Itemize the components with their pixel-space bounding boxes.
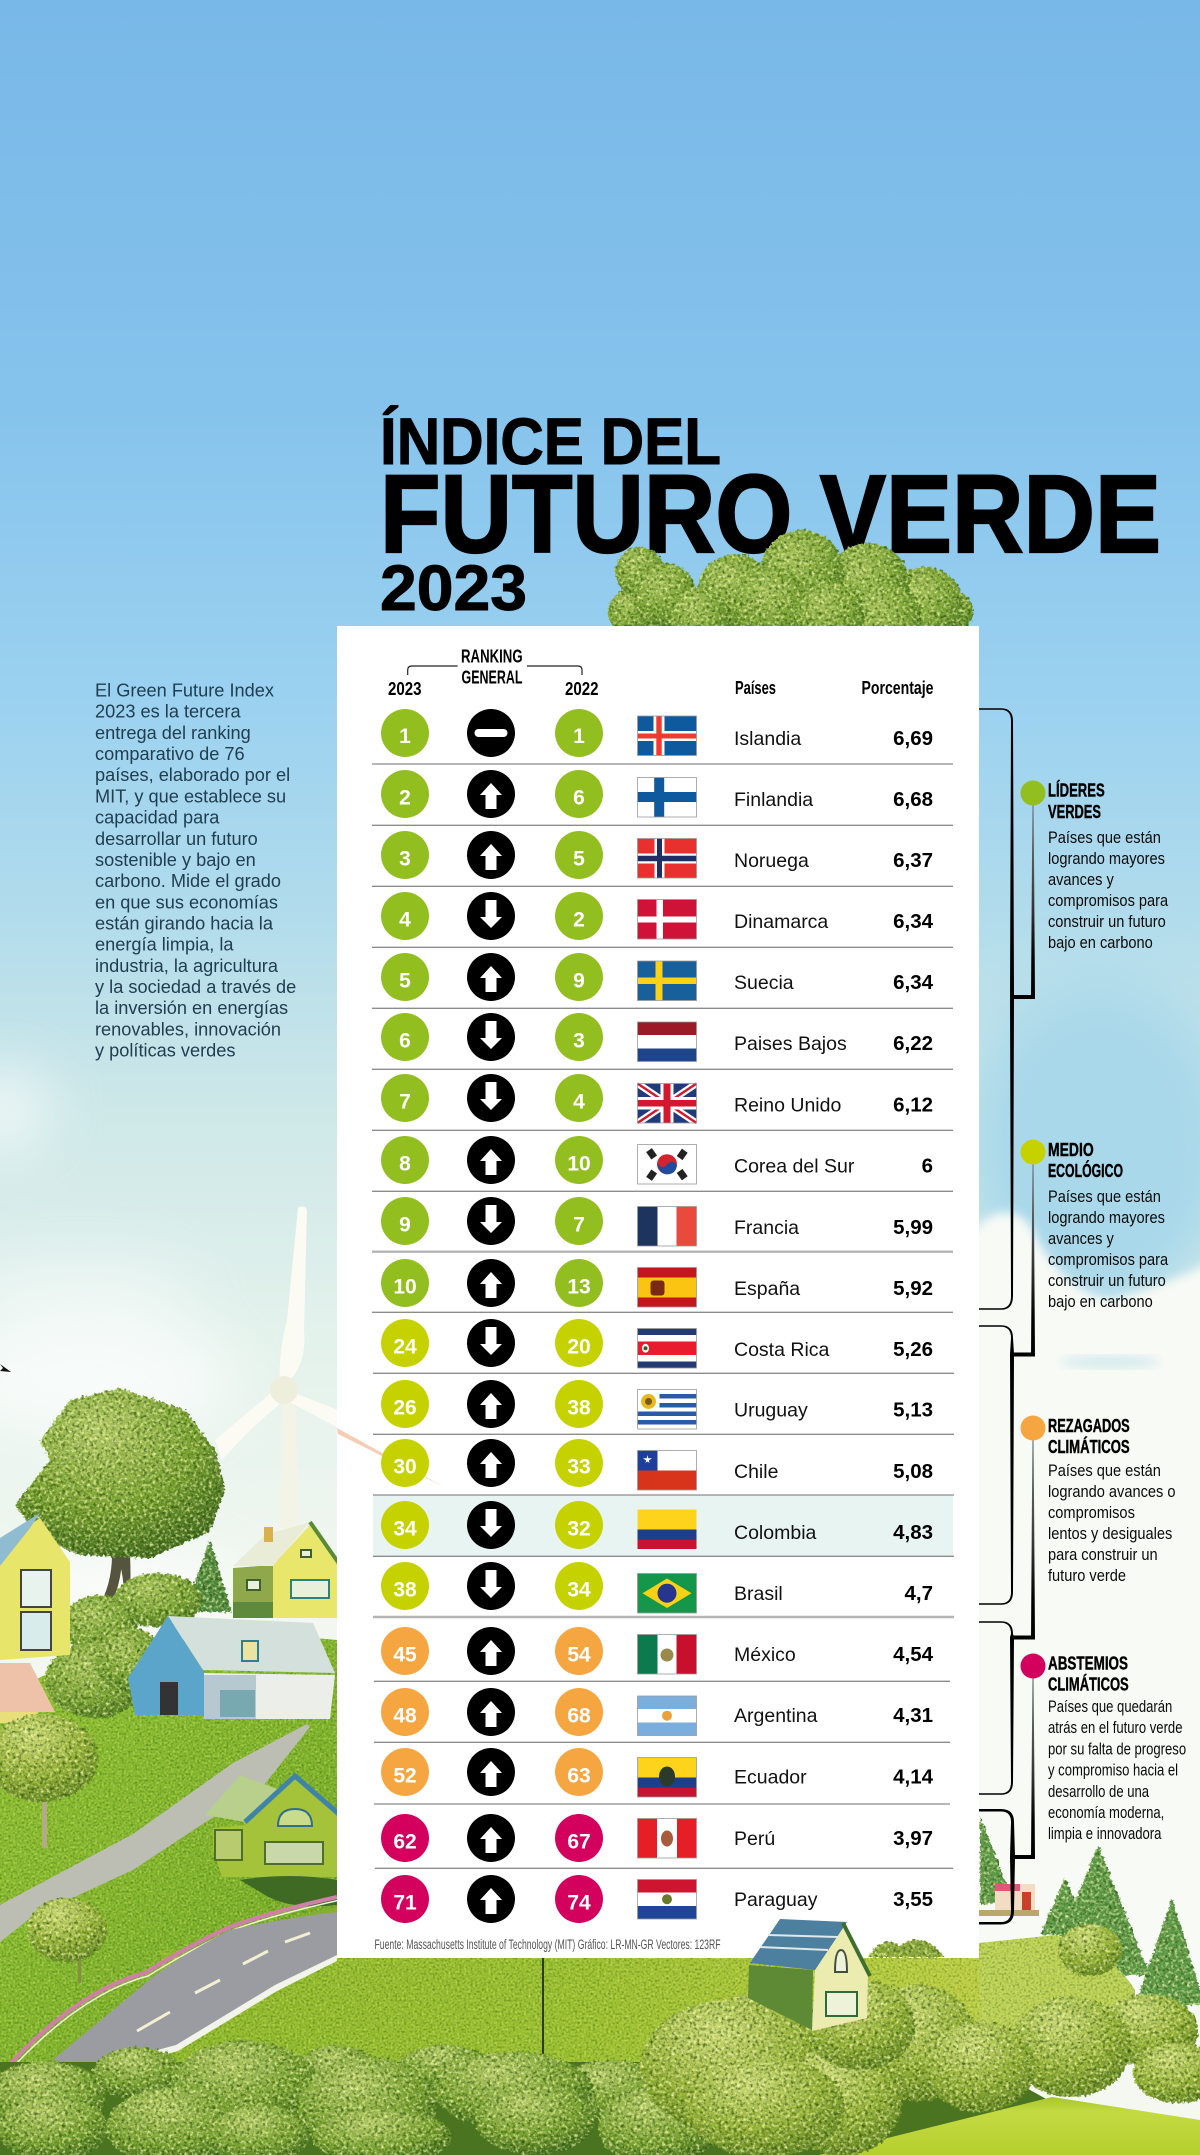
legend text: Países que están [1048, 1188, 1161, 1206]
legend heading: REZAGADOS [1048, 1416, 1130, 1436]
percentage: 5,13 [893, 1398, 933, 1422]
rank 2023: 8 [399, 1152, 411, 1176]
rank 2023: 45 [393, 1644, 417, 1666]
rank 2022: 20 [567, 1336, 591, 1358]
title: 2023 [380, 552, 527, 624]
legend heading: MEDIO [1048, 1140, 1094, 1160]
country: Dinamarca [734, 911, 828, 933]
rank 2023 [381, 1688, 429, 1736]
intro text: capacidad para [95, 808, 220, 828]
legend dot [1020, 780, 1046, 806]
rank 2022 [555, 1013, 603, 1061]
intro text: El Green Future Index [95, 680, 274, 700]
country: Uruguay [734, 1400, 808, 1422]
illustration: hedges right [640, 1924, 1200, 2155]
legend heading: VERDES [1048, 802, 1101, 822]
legend text [1048, 1188, 1168, 1311]
rank 2023: 38 [393, 1578, 417, 1602]
trend icon: up [467, 831, 515, 879]
table header: Porcentaje [862, 678, 934, 698]
rank 2023: 10 [393, 1276, 417, 1298]
rank 2023 [381, 1259, 429, 1307]
rank 2022 [555, 1875, 603, 1923]
row: Perú [381, 1814, 933, 1862]
intro text [95, 680, 296, 1061]
rank 2022: 38 [567, 1396, 591, 1420]
legend text [1048, 1462, 1176, 1585]
country: Paises Bajos [734, 1033, 847, 1055]
rank 2023: 5 [399, 970, 411, 992]
trend icon: up [467, 1875, 515, 1923]
trend icon: no change [467, 709, 515, 757]
rank 2022 [555, 1197, 603, 1245]
panel: ranking table [337, 626, 979, 1958]
rank 2022 [555, 770, 603, 818]
rank 2022 [555, 1814, 603, 1862]
rank 2022: 10 [567, 1152, 591, 1176]
illustration: pines right [980, 1815, 1200, 2005]
rank 2023 [381, 953, 429, 1001]
country: Corea del Sur [734, 1156, 855, 1178]
trend icon: up [467, 1748, 515, 1796]
flag: Argentina [638, 1696, 696, 1736]
rank 2023: 9 [399, 1214, 411, 1236]
percentage: 5,08 [893, 1460, 933, 1483]
legend heading: ABSTEMIOS [1048, 1654, 1128, 1674]
illustration: thin trunk under table [542, 1958, 544, 2066]
flag: Netherlands [638, 1022, 696, 1062]
illustration: road [11, 1897, 340, 2077]
rank 2022 [555, 1562, 603, 1610]
percentage: 3,97 [893, 1827, 933, 1850]
country: Argentina [734, 1705, 818, 1727]
flag: United Kingdom [638, 1084, 696, 1123]
legend text: construir un futuro [1048, 913, 1166, 931]
row: Dinamarca [381, 892, 934, 940]
rank 2022 [555, 1688, 603, 1736]
illustration: small pine [184, 1540, 232, 1612]
rank 2023: 6 [399, 1030, 411, 1052]
country: España [734, 1278, 800, 1300]
illustration: foliage over table edge [868, 1940, 945, 1958]
country: Ecuador [734, 1766, 807, 1788]
row: Paises Bajos [381, 1013, 933, 1062]
percentage: 4,7 [904, 1582, 933, 1605]
row: Colombia [381, 1501, 933, 1549]
intro text: están girando hacia la [95, 914, 274, 934]
country: Perú [734, 1828, 775, 1850]
trend icon: up [467, 770, 515, 818]
flag: Norway [638, 838, 696, 878]
rank 2022 [555, 1501, 603, 1549]
trend icon: up [467, 1380, 515, 1428]
rank 2023: 62 [393, 1830, 417, 1854]
row: Finlandia [381, 770, 933, 818]
rank 2022: 32 [567, 1518, 591, 1540]
rank 2022: 5 [573, 848, 585, 870]
rank 2023 [381, 709, 429, 757]
trend icon: down [467, 1319, 515, 1367]
illustration: hill right [979, 1935, 1135, 2040]
rank 2023 [381, 1627, 429, 1675]
clouds left [0, 1070, 250, 1630]
flag: South Korea [638, 1144, 696, 1184]
legend heading: CLIMÁTICOS [1048, 1436, 1130, 1457]
row: Francia [381, 1197, 933, 1246]
title: ÍNDICE DEL [380, 405, 721, 478]
rank 2022: 6 [573, 786, 585, 810]
percentage: 5,99 [893, 1216, 933, 1239]
legend text: avances y [1048, 871, 1114, 889]
rank 2023 [381, 1319, 429, 1367]
rank 2023 [381, 1562, 429, 1610]
illustration: blue house [128, 1616, 335, 1719]
trend icon: down [467, 1501, 515, 1549]
country: Paraguay [734, 1889, 818, 1911]
legend text: economía moderna, [1048, 1803, 1164, 1822]
row: Reino Unido [381, 1074, 933, 1123]
rank 2022: 67 [567, 1830, 591, 1854]
intro text: industria, la agricultura [95, 956, 279, 976]
country: Colombia [734, 1522, 817, 1544]
row: España [381, 1259, 933, 1307]
illustration: ground base [0, 2062, 1048, 2155]
illustration: hedges left [0, 2041, 718, 2155]
trend icon: up [467, 1627, 515, 1675]
intro text: carbono. Mide el grado [95, 871, 281, 891]
country: Brasil [734, 1583, 783, 1605]
rank 2023 [381, 892, 429, 940]
table header: 2023 [388, 679, 422, 699]
rank 2023: 26 [393, 1396, 417, 1420]
bracket: abstemios climáticos [979, 1674, 1035, 1924]
legend heading: CLIMÁTICOS [1048, 1674, 1129, 1694]
legend: líderes verdes [1020, 780, 1168, 952]
sky tint right [960, 980, 1200, 1320]
legend text: Países que quedarán [1048, 1697, 1172, 1716]
row: Noruega [381, 831, 933, 879]
legend heading [1048, 780, 1105, 822]
clouds right [960, 1212, 1200, 2000]
legend: abstemios climáticos [1020, 1654, 1186, 1844]
trend icon: down [467, 1562, 515, 1610]
legend heading [1048, 1654, 1129, 1694]
bracket: medio ecológico [979, 1160, 1035, 1605]
intro text: renovables, innovación [95, 1019, 281, 1039]
legend text: por su falta de progreso [1048, 1740, 1186, 1759]
flag: Uruguay [638, 1390, 696, 1429]
rank 2022 [555, 892, 603, 940]
rank 2023: 7 [399, 1090, 411, 1114]
legend text: para construir un [1048, 1546, 1158, 1564]
rank 2022: 54 [567, 1644, 591, 1666]
row: Corea del Sur [381, 1136, 933, 1184]
percentage: 5,92 [893, 1277, 933, 1300]
illustration: small trees left [0, 1714, 107, 1983]
flag: Chile [638, 1450, 696, 1490]
flag: Peru [638, 1818, 696, 1858]
legend text: logrando mayores [1048, 850, 1165, 868]
row: Islandia [381, 709, 933, 757]
rank 2023 [381, 1875, 429, 1923]
table header: RANKING [461, 647, 523, 667]
intro text: sostenible y bajo en [95, 850, 256, 870]
legend text: construir un futuro [1048, 1272, 1166, 1290]
intro text: en que sus economías [95, 892, 278, 912]
rank 2023 [381, 1380, 429, 1428]
row: Suecia [381, 953, 934, 1001]
row: Ecuador [381, 1748, 934, 1797]
flag: France [638, 1206, 696, 1246]
turbine blade tip over table [337, 1428, 444, 1487]
trend icon: down [467, 1074, 515, 1122]
country: Noruega [734, 850, 809, 872]
legend heading [1048, 1416, 1130, 1457]
legend dot [1020, 1654, 1046, 1678]
flag: Colombia [638, 1510, 696, 1549]
legend text: logrando mayores [1048, 1209, 1165, 1227]
rank 2022 [555, 1074, 603, 1122]
rank 2023: 52 [393, 1764, 417, 1788]
rank 2022: 13 [567, 1276, 591, 1298]
intro text: comparativo de 76 [95, 744, 245, 764]
illustration: wind turbine [215, 1206, 338, 1528]
illustration: walkway [0, 1724, 310, 1942]
flag: Denmark [638, 900, 696, 939]
legend text [1048, 829, 1168, 952]
rank 2023 [381, 1197, 429, 1245]
rank 2022 [555, 1319, 603, 1367]
rank 2022 [555, 953, 603, 1001]
country: Finlandia [734, 789, 813, 811]
trend icon: up [467, 1136, 515, 1184]
flag: Finland [638, 778, 696, 817]
illustration: cottage bottom [748, 1919, 870, 2031]
legend text: compromisos para [1048, 892, 1168, 910]
rank 2022 [555, 1748, 603, 1796]
legend text: limpia e innovadora [1048, 1825, 1162, 1844]
rank 2023: 3 [399, 848, 411, 870]
country: Islandia [734, 728, 801, 750]
trend icon: down [467, 1013, 515, 1061]
rank 2023 [381, 1501, 429, 1549]
rank 2022 [555, 1627, 603, 1675]
legend text: logrando avances o [1048, 1483, 1176, 1501]
intro text: la inversión en energías [95, 998, 288, 1018]
country: Suecia [734, 972, 794, 994]
percentage: 4,83 [893, 1521, 933, 1544]
table header: 2022 [565, 679, 598, 699]
legend heading [1048, 1140, 1123, 1181]
percentage: 6,37 [893, 849, 933, 872]
rank 2023 [381, 1814, 429, 1862]
legend text: avances y [1048, 1230, 1114, 1248]
flag: Spain [638, 1268, 696, 1307]
rank 2022: 3 [573, 1030, 585, 1052]
rank 2023: 1 [399, 725, 411, 748]
rank 2022: 7 [573, 1214, 585, 1236]
rank 2022: 63 [567, 1764, 591, 1788]
rank 2023 [381, 831, 429, 879]
percentage: 6,34 [893, 910, 934, 933]
row separators [372, 764, 954, 1868]
bracket: rezagados climáticos [979, 1436, 1035, 1795]
rank 2022 [555, 709, 603, 757]
illustration: large tree [15, 1388, 225, 1610]
row: Brasil [381, 1562, 933, 1613]
row: Paraguay [381, 1875, 933, 1923]
legend text [1048, 1697, 1186, 1844]
percentage: 6,34 [893, 971, 934, 994]
rank 2023: 34 [393, 1518, 417, 1540]
country: México [734, 1644, 796, 1666]
rank 2022: 1 [573, 725, 585, 748]
country: Francia [734, 1217, 799, 1239]
legend text: bajo en carbono [1048, 1293, 1153, 1311]
title [380, 405, 1161, 624]
table header: Países [735, 678, 776, 698]
rank 2023 [381, 1013, 429, 1061]
legend text: compromisos [1048, 1504, 1135, 1522]
flag: Paraguay [638, 1880, 696, 1919]
rank 2023 [381, 1136, 429, 1184]
rank 2023: 2 [399, 786, 411, 810]
intro text: y la sociedad a través de [95, 977, 296, 997]
rank 2023 [381, 770, 429, 818]
intro text: entrega del ranking [95, 723, 251, 743]
percentage: 5,26 [893, 1338, 933, 1361]
legend text: Países que están [1048, 1462, 1161, 1480]
percentage: 6,69 [893, 727, 933, 750]
rank 2022: 2 [573, 908, 585, 932]
legend connector brackets [979, 708, 1035, 1925]
rank 2022: 74 [567, 1892, 591, 1914]
rank 2022: 33 [567, 1456, 591, 1478]
rank 2022: 4 [573, 1090, 585, 1114]
legend text: Países que están [1048, 829, 1161, 847]
icon: bird [0, 1364, 11, 1372]
intro text: energía limpia, la [95, 935, 234, 955]
rank 2022 [555, 1259, 603, 1307]
trend icon: up [467, 1814, 515, 1862]
percentage: 4,14 [893, 1766, 934, 1788]
rank 2023: 24 [393, 1336, 417, 1358]
rank 2023 [381, 1748, 429, 1796]
legend text: lentos y desiguales [1048, 1525, 1172, 1543]
percentage: 6,68 [893, 788, 933, 811]
percentage: 3,55 [893, 1888, 933, 1911]
country: Chile [734, 1461, 778, 1483]
table header [388, 647, 934, 699]
row: Costa Rica [381, 1319, 933, 1368]
rank 2022 [555, 1439, 603, 1487]
rank 2023: 30 [393, 1456, 417, 1478]
rank 2022 [555, 1380, 603, 1428]
illustration: yellow house left [0, 1513, 70, 1660]
rank 2023: 48 [393, 1704, 417, 1728]
legend dot [1020, 1416, 1046, 1440]
trend icon: down [467, 1197, 515, 1245]
highlighted row: Colombia [373, 1495, 953, 1556]
legend text: futuro verde [1048, 1567, 1126, 1585]
illustration: treetop above table [608, 530, 973, 662]
intro text: desarrollar un futuro [95, 829, 258, 849]
percentage: 4,54 [893, 1643, 934, 1666]
trend icon: up [467, 1439, 515, 1487]
percentage: 6 [922, 1154, 933, 1178]
rank 2023: 4 [399, 908, 411, 932]
rank 2022: 34 [567, 1578, 591, 1602]
row: Uruguay [381, 1380, 933, 1429]
source note: Fuente: Massachusetts Institute of Technology (MIT) Gráfico: LR-MN-GR Vectores: 123RF [374, 1937, 720, 1952]
rank 2022: 9 [573, 970, 585, 992]
flag: Sweden [638, 961, 696, 1000]
rank 2022 [555, 831, 603, 879]
row: Argentina [381, 1688, 933, 1736]
flag: Brazil [638, 1574, 696, 1613]
flag: Costa Rica [638, 1328, 696, 1368]
intro text: y políticas verdes [95, 1041, 236, 1061]
illustration: hillside [0, 1573, 337, 2085]
trend icon: down [467, 892, 515, 940]
legend text: desarrollo de una [1048, 1782, 1150, 1801]
country: Costa Rica [734, 1339, 830, 1361]
rank 2023 [381, 1074, 429, 1122]
row: México [381, 1627, 934, 1675]
rank 2022 [555, 1136, 603, 1184]
intro text: MIT, y que establece su [95, 786, 286, 806]
intro text: 2023 es la tercera [95, 702, 241, 722]
illustration: lawn bottom right [819, 2097, 1200, 2155]
rank 2023 [381, 1439, 429, 1487]
illustration: house top right [233, 1522, 347, 1618]
illustration: small building right [979, 1884, 1039, 1916]
legend dot [1020, 1140, 1046, 1164]
bracket: líderes verdes [979, 708, 1035, 1310]
rank 2022: 68 [567, 1704, 591, 1728]
legend: medio ecológico [1020, 1140, 1168, 1311]
percentage: 6,22 [893, 1032, 933, 1055]
flag: Mexico [638, 1634, 696, 1674]
country: Reino Unido [734, 1094, 841, 1116]
legend text: y compromiso hacia el [1048, 1761, 1178, 1780]
trend icon: up [467, 953, 515, 1001]
legend text: atrás en el futuro verde [1048, 1719, 1182, 1738]
legend text: bajo en carbono [1048, 934, 1153, 952]
legend: rezagados climáticos [1020, 1416, 1176, 1585]
legend heading: LÍDERES [1048, 780, 1105, 801]
flag: Ecuador [638, 1758, 696, 1797]
illustration: peach house [0, 1663, 55, 1723]
table header: GENERAL [462, 667, 522, 687]
trend icon: up [467, 1688, 515, 1736]
intro text: países, elaborado por el [95, 765, 290, 785]
trend icon: up [467, 1259, 515, 1307]
rank 2023: 71 [393, 1892, 417, 1914]
flag: Iceland [638, 716, 696, 756]
illustration: green house [205, 1775, 340, 1906]
legend heading: ECOLÓGICO [1048, 1160, 1123, 1181]
illustration: grass under table [160, 1950, 990, 2075]
legend text: compromisos para [1048, 1251, 1168, 1269]
percentage: 6,12 [893, 1094, 933, 1116]
percentage: 4,31 [893, 1704, 933, 1727]
row: Chile [381, 1439, 933, 1490]
